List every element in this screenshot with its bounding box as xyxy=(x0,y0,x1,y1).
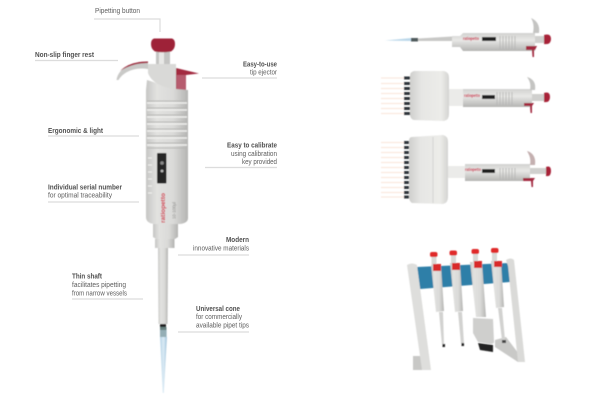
label: easy-to-use tip ejector: tip ejector xyxy=(250,70,278,76)
cone xyxy=(160,324,166,327)
label: easy-to-use tip ejector: Easy-to-use xyxy=(243,62,277,68)
label: modern innovative materials: Modern xyxy=(226,237,249,244)
label: ergonomic and light: Ergonomic & light xyxy=(48,128,104,135)
grip ribs xyxy=(147,101,187,148)
label: pipetting button xyxy=(94,8,160,32)
pipette 1 xyxy=(430,252,445,347)
label: thin shaft: from narrow vessels xyxy=(72,290,127,298)
brand logo: ratiopetto xyxy=(160,193,167,223)
collar xyxy=(153,224,178,239)
label: modern innovative materials: innovative materials xyxy=(193,246,249,252)
label: non-slip finger rest xyxy=(35,52,118,60)
pipette 2 xyxy=(450,250,464,346)
label: universal cone xyxy=(178,306,249,332)
scale ticks xyxy=(148,158,152,193)
label: individual serial number: for optimal traceability xyxy=(48,192,112,200)
label: universal cone: Universal cone xyxy=(196,306,240,313)
label: thin shaft: Thin shaft xyxy=(72,274,103,280)
lower body xyxy=(146,80,188,224)
12-channel pipette xyxy=(381,135,551,204)
rack right foot xyxy=(495,337,525,362)
button xyxy=(151,38,175,52)
ejector xyxy=(176,68,199,90)
label: easy to calibrate xyxy=(205,142,277,168)
8-channel pipette: ratiopetto xyxy=(464,93,480,98)
main single-channel pipette xyxy=(116,38,199,393)
label: thin shaft xyxy=(72,274,143,299)
12-channel pipette: ratiopetto xyxy=(465,167,481,172)
pipette rack with four pipettes xyxy=(407,248,525,370)
rack left foot xyxy=(413,356,424,370)
8-channel pipette xyxy=(381,71,550,121)
neck xyxy=(156,50,170,65)
label: easy to calibrate: Easy to calibrate xyxy=(227,142,277,150)
single-channel pipette, horizontal: ratiopetto xyxy=(463,36,479,41)
label: thin shaft: facilitates pipetting xyxy=(72,282,126,289)
rack blue bar xyxy=(417,263,510,289)
shaft xyxy=(158,248,168,324)
label: ergonomic and light xyxy=(48,128,139,136)
model text: 10-100µl xyxy=(172,202,176,219)
upper body xyxy=(148,64,176,89)
label: easy to calibrate: using calibration xyxy=(231,151,277,158)
label: universal cone: for commercially xyxy=(196,314,242,321)
label: easy to calibrate: key provided xyxy=(242,159,277,166)
rack left arm xyxy=(407,264,431,370)
label: easy-to-use tip ejector xyxy=(202,62,278,78)
label: universal cone: available pipet tips xyxy=(196,322,249,330)
volume window xyxy=(157,153,166,184)
tip xyxy=(160,337,167,393)
pipette 3 multichannel xyxy=(470,249,494,352)
pipette 4 xyxy=(491,248,506,343)
label: individual serial number: Individual serial number xyxy=(48,184,122,192)
label: pipetting button: Pipetting button xyxy=(95,8,140,15)
single-channel pipette, horizontal xyxy=(385,18,551,57)
finger rest hook xyxy=(116,62,148,80)
label: non-slip finger rest: Non-slip finger rest xyxy=(35,52,95,59)
label: modern innovative materials xyxy=(178,237,249,255)
rack right arm xyxy=(506,258,525,362)
label: individual serial number xyxy=(48,184,139,202)
